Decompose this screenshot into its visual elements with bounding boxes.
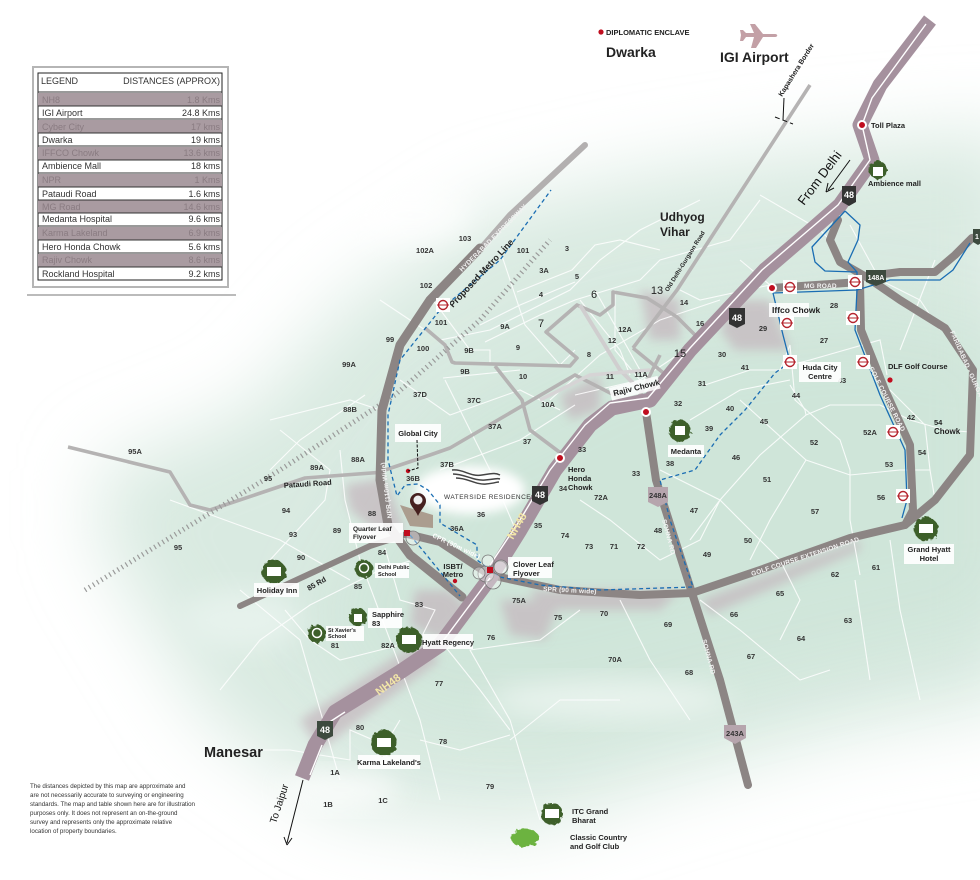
label: Toll Plaza: Toll Plaza <box>871 121 906 130</box>
label: Quarter Leaf Flyover <box>349 523 403 543</box>
sector numbers: 3A <box>539 266 549 275</box>
sector numbers: 45 <box>760 417 768 426</box>
legend row text: 24.8 Kms <box>182 108 220 118</box>
sector numbers: 56 <box>877 493 885 502</box>
large sector numbers: 13 <box>651 285 663 297</box>
sector numbers: 37B <box>440 460 454 469</box>
label: Global City <box>395 424 441 471</box>
legend row text: 1 Kms <box>194 175 220 185</box>
large sector numbers <box>538 285 686 360</box>
sector numbers: 27 <box>820 336 828 345</box>
brown plot and location pin <box>400 493 433 528</box>
legend header: LEGEND <box>41 76 79 86</box>
sector numbers: 30 <box>718 350 726 359</box>
sector numbers: 61 <box>872 563 880 572</box>
large sector numbers: 6 <box>591 289 597 301</box>
sector numbers: 90 <box>297 553 305 562</box>
label: NPR road: NPR (110m Wide) <box>380 462 394 519</box>
sector numbers: 70A <box>608 655 622 664</box>
disclaimer text: purposes only. It does not represent an on-the-ground <box>30 810 178 817</box>
shield 248A: 248A <box>649 491 668 500</box>
sector numbers: 12 <box>608 336 616 345</box>
icon: Ambience mall: Ambience mall <box>868 179 921 188</box>
sector road grid <box>170 195 970 820</box>
icon: Grand Hyatt Hotel <box>904 517 954 564</box>
road labels <box>380 203 980 675</box>
icon: Medanta: Medanta <box>671 447 702 456</box>
sector numbers: 103 <box>459 234 471 243</box>
label: ISBT Metro: ISBT/ <box>443 562 463 571</box>
label: Iffco Chowk: Iffco Chowk <box>772 305 820 315</box>
legend header: DISTANCES (APPROX) <box>123 76 220 86</box>
label: Diplomatic Enclave: DIPLOMATIC ENCLAVE <box>606 28 689 37</box>
sector numbers: 66 <box>730 610 738 619</box>
sector numbers: 67 <box>747 652 755 661</box>
legend shaded rows <box>38 93 222 267</box>
label: Clover Leaf Flyover: Flyover <box>513 569 540 578</box>
icon: Classic Country and Golf Club <box>511 829 628 851</box>
icon: Grand Hyatt Hotel: Grand Hyatt <box>908 545 950 554</box>
sector numbers: 33 <box>632 469 640 478</box>
icon: Classic Country and Golf Club: and Golf Club <box>570 842 620 851</box>
shield 248A <box>648 487 668 507</box>
shield 48 centre: 48 <box>732 313 742 323</box>
legend row text: 19 kms <box>191 135 220 145</box>
sector numbers: 49 <box>703 550 711 559</box>
sector numbers: 36B <box>406 474 420 483</box>
shield 48 south centre: 48 <box>535 490 545 500</box>
icon: Medanta <box>668 420 704 457</box>
legend row text: Karma Lakeland <box>42 228 108 238</box>
NH48 highway <box>302 20 930 778</box>
place labels <box>349 121 961 579</box>
icon: ITC Grand Bharat: ITC Grand <box>572 807 608 816</box>
legend row text: 8.6 kms <box>188 255 220 265</box>
label: Old Delhi-Gurgaon Road: Old Delhi-Gurgaon Road <box>665 230 707 293</box>
legend row text: Rajiv Chowk <box>42 255 93 265</box>
label: Hero Honda Chowk: Chowk <box>568 483 593 492</box>
legend row text: MG Road <box>42 202 81 212</box>
sector numbers: 53 <box>885 460 893 469</box>
label: Udhyog Vihar: Vihar <box>660 225 690 239</box>
legend header <box>41 76 220 86</box>
legend row text: NH8 <box>42 95 60 105</box>
label: ISBT Metro: Metro <box>443 570 464 579</box>
label: Proposed Metro Line: Proposed Metro Line <box>447 237 516 309</box>
legend row text: 6.9 kms <box>188 228 220 238</box>
sector numbers: 79 <box>486 782 494 791</box>
disclaimer text: are not necessarily accurate to surveying or engineering <box>30 792 184 799</box>
icon: Sapphire 83: Sapphire <box>372 610 404 619</box>
highway shields <box>317 186 980 744</box>
label: IGI Airport: IGI Airport <box>720 49 789 65</box>
label: Hero Honda Chowk: Hero <box>568 465 585 474</box>
sector numbers: 34 <box>559 484 568 493</box>
label: Huda City Centre: Huda City <box>802 363 838 372</box>
sector numbers: 99 <box>386 335 394 344</box>
legend row text: 9.2 kms <box>188 269 220 279</box>
sector numbers: 31 <box>698 379 706 388</box>
NH48 lower label: NH48 <box>374 672 403 698</box>
legend row text: 1.8 Kms <box>187 95 220 105</box>
sector numbers: 88A <box>351 455 365 464</box>
icon: Ambience mall <box>868 161 921 188</box>
sector numbers: 9 <box>516 343 520 352</box>
proposed metro hatched line <box>85 240 550 590</box>
shield 48 south centre <box>532 486 548 505</box>
label: Dwarka: Dwarka <box>606 44 656 60</box>
shield 243A: 243A <box>726 729 745 738</box>
sector numbers: 33 <box>578 445 586 454</box>
metro station icons <box>436 275 910 503</box>
sector numbers: 94 <box>282 506 291 515</box>
label: MG Road: MG ROAD <box>804 283 837 290</box>
sector numbers: 78 <box>439 737 447 746</box>
flyover markers <box>404 530 493 573</box>
sector numbers: 89A <box>310 463 324 472</box>
shield 48 south: 48 <box>320 725 330 735</box>
sector numbers: 37A <box>488 422 502 431</box>
sector numbers: 46 <box>732 453 740 462</box>
metro lines <box>388 190 970 596</box>
label: 54 Chowk: Chowk <box>934 427 961 436</box>
legend row text: Ambience Mall <box>42 161 101 171</box>
sector numbers: 101 <box>517 246 529 255</box>
sector numbers: 95 <box>174 543 182 552</box>
dots without halo <box>406 377 893 583</box>
label: Quarter Leaf Flyover: Quarter Leaf <box>353 526 392 533</box>
icon: Sapphire 83 <box>349 608 404 628</box>
sector numbers <box>128 234 927 809</box>
legend row text: Hero Honda Chowk <box>42 242 121 252</box>
large sector numbers: 7 <box>538 318 544 330</box>
label: expressway: HYDERABAD EXPRESSWAY <box>458 203 529 273</box>
shield 48 centre <box>729 308 745 328</box>
sector numbers: 9A <box>500 322 510 331</box>
sector numbers: 11 <box>606 372 614 381</box>
shield 148A: 148A <box>868 275 884 282</box>
pink-grey land patches <box>300 290 860 750</box>
sector numbers: 71 <box>610 542 618 551</box>
disclaimer text: location of property boundaries. <box>30 828 117 835</box>
label: Huda City Centre: Centre <box>808 372 832 381</box>
arrow: To Jaipur <box>268 780 303 845</box>
legend row text <box>42 95 220 279</box>
icon: St Xavier's School: St Xavier's <box>328 628 356 634</box>
legend row text: 17 kms <box>191 122 220 132</box>
sector numbers: 88 <box>368 509 376 518</box>
sector numbers: 40 <box>726 404 734 413</box>
sector numbers: 76 <box>487 633 495 642</box>
sector numbers: 1B <box>323 800 333 809</box>
sector numbers: 37 <box>523 437 531 446</box>
sector numbers: 101 <box>435 318 447 327</box>
label: Udhyog Vihar: Udhyog <box>660 210 705 224</box>
sector numbers: 89 <box>333 526 341 535</box>
sector numbers: 70 <box>600 609 608 618</box>
shield east <box>973 229 980 245</box>
sector numbers: 9B <box>464 346 474 355</box>
legend row text: Rockland Hospital <box>42 269 115 279</box>
label: Rajiv Chowk: Rajiv Chowk <box>612 378 661 398</box>
icon: Holiday Inn: Holiday Inn <box>257 586 298 595</box>
legend row text: 1.6 kms <box>188 189 220 199</box>
sector numbers: 64 <box>797 634 806 643</box>
sector numbers: 102A <box>416 246 435 255</box>
sector numbers: 43 <box>838 376 846 385</box>
label: Manesar: Manesar <box>204 745 263 761</box>
icon: Sapphire 83: 83 <box>372 619 380 628</box>
legend row text: 5.6 kms <box>188 242 220 252</box>
sector numbers: 65 <box>776 589 784 598</box>
legend underline <box>27 294 236 296</box>
shield 48 south <box>317 721 333 740</box>
arrow: To Jaipur: To Jaipur <box>268 782 292 825</box>
sector numbers: 52 <box>810 438 818 447</box>
sector numbers: 83 <box>415 600 423 609</box>
sector numbers: 57 <box>811 507 819 516</box>
sector numbers: 41 <box>741 363 749 372</box>
icon: ITC Grand Bharat <box>541 803 609 825</box>
sector numbers: 10 <box>519 372 527 381</box>
label: Global City: Global City <box>398 429 439 438</box>
arrow: From Delhi: From Delhi <box>794 148 845 208</box>
label: Golf Course Road: GOLF COURSE ROAD <box>867 366 906 433</box>
sector numbers: 1C <box>378 796 388 805</box>
icon: Grand Hyatt Hotel: Hotel <box>920 554 938 563</box>
disclaimer text: survey and represents only the approximate relative <box>30 819 173 826</box>
label: 54 Chowk: 54 <box>934 418 942 427</box>
legend row text: 13.6 kms <box>183 148 220 158</box>
sector numbers: 8 <box>587 350 591 359</box>
label: Clover Leaf Flyover <box>508 557 554 578</box>
label: Iffco Chowk <box>769 303 820 317</box>
icon: St Xavier's School: School <box>328 634 347 640</box>
label: SPR: SPR (90 m wide) <box>543 586 597 596</box>
sector numbers: 100 <box>417 344 429 353</box>
sector numbers: 47 <box>690 506 698 515</box>
shield 48 north <box>842 186 856 206</box>
sector numbers: 42 <box>907 413 915 422</box>
icon: ITC Grand Bharat: Bharat <box>572 816 596 825</box>
icon: Delhi Public School: Delhi Public <box>378 565 409 571</box>
sector numbers: 77 <box>435 679 443 688</box>
icon: airplane <box>740 24 777 48</box>
expressway and SPR roads <box>240 145 980 785</box>
sector numbers: 37D <box>413 390 427 399</box>
sector numbers: 99A <box>342 360 356 369</box>
sector numbers: 80 <box>356 723 364 732</box>
sector numbers: 11A <box>634 370 648 379</box>
sector numbers: 16 <box>696 319 704 328</box>
legend row text: Pataudi Road <box>42 189 97 199</box>
sector numbers: 73 <box>585 542 593 551</box>
label: Quarter Leaf Flyover: Flyover <box>353 534 377 541</box>
shield 148A <box>866 270 886 286</box>
highway text NH48 <box>374 511 530 698</box>
label: 85 Rd: 85 Rd <box>306 575 328 593</box>
sector numbers: 85 <box>354 582 362 591</box>
icon: Hyatt Regency: Hyatt Regency <box>422 638 475 647</box>
sector numbers: 75 <box>554 613 562 622</box>
sector numbers: 12A <box>618 325 632 334</box>
icon: Karma Lakeland: Karma Lakeland's <box>357 758 421 767</box>
legend row text: IGI Airport <box>42 108 83 118</box>
disclaimer text: standards. The map and table shown here are for illustration <box>30 801 196 808</box>
flyover symbols <box>406 531 508 589</box>
label: Clover Leaf Flyover: Clover Leaf <box>513 560 554 569</box>
sector numbers: 75A <box>512 596 526 605</box>
waterside residences logo <box>444 470 536 501</box>
large sector numbers: 15 <box>674 348 686 360</box>
sector numbers: 95A <box>128 447 142 456</box>
red location dots <box>556 121 866 462</box>
sector numbers: 51 <box>763 475 771 484</box>
sector numbers: 82A <box>381 641 395 650</box>
sector numbers: 37C <box>467 396 481 405</box>
label: CPR: CPR (90m wide) <box>431 532 481 561</box>
sector numbers: 35 <box>534 521 542 530</box>
sector numbers: 48 <box>654 526 662 535</box>
sector numbers: 62 <box>831 570 839 579</box>
sector numbers: 68 <box>685 668 693 677</box>
disclaimer text: The distances depicted by this map are approximate and <box>30 783 185 790</box>
sector numbers: 102 <box>420 281 432 290</box>
sector numbers: 14 <box>680 298 689 307</box>
icon: Delhi Public School <box>355 560 409 578</box>
legend row lines <box>38 92 222 267</box>
sector numbers: 28 <box>830 301 838 310</box>
legend row text: Medanta Hospital <box>42 214 112 224</box>
icon: Karma Lakeland <box>357 730 421 769</box>
legend row text: IFFCO Chowk <box>42 148 100 158</box>
sector numbers: 72A <box>594 493 608 502</box>
icon: Hyatt Regency <box>396 627 475 653</box>
sector numbers: 36A <box>450 524 464 533</box>
sector numbers: 69 <box>664 620 672 629</box>
sector numbers: 5 <box>575 272 579 281</box>
waterside residences logo: WATERSIDE RESIDENCES <box>444 494 536 501</box>
sector numbers: 88B <box>343 405 357 414</box>
sector numbers: 36 <box>477 510 485 519</box>
sector numbers: 44 <box>792 391 801 400</box>
sector numbers: 81 <box>331 641 339 650</box>
label: Golf Course Extension Road: GOLF COURSE EXTENSION ROAD <box>750 536 860 578</box>
sector numbers: 72 <box>637 542 645 551</box>
Kapashera Border marker: Kapashera Border <box>778 43 816 98</box>
label: Huda City Centre <box>799 362 841 382</box>
sector numbers: 29 <box>759 324 767 333</box>
legend table <box>33 67 228 287</box>
legend row text: 18 kms <box>191 161 220 171</box>
shield 243A <box>724 725 746 744</box>
sector numbers: 1A <box>330 768 340 777</box>
sector numbers: 4 <box>539 290 544 299</box>
sector numbers: 84 <box>378 548 387 557</box>
legend row text: Dwarka <box>42 135 73 145</box>
shield 48 north: 48 <box>844 190 854 200</box>
legend row text: Cyber City <box>42 122 85 132</box>
sector numbers: 54 <box>918 448 927 457</box>
amenity icons <box>254 161 954 851</box>
icon: Delhi Public School: School <box>378 572 397 578</box>
legend row text: NPR <box>42 175 62 185</box>
NH48 upper label: NH48 <box>505 511 530 542</box>
sector numbers: 38 <box>666 459 674 468</box>
sector numbers: 63 <box>844 616 852 625</box>
sector numbers: 10A <box>541 400 555 409</box>
label: Sohna Rd lower: SOHNA RD <box>700 639 716 675</box>
sector numbers: 39 <box>705 424 713 433</box>
icon: Classic Country and Golf Club: Classic Country <box>570 833 627 842</box>
sector numbers: 52A <box>863 428 877 437</box>
light grey sector roads <box>68 85 810 510</box>
icon: Holiday Inn <box>254 560 299 597</box>
sector numbers: 95 <box>264 474 272 483</box>
label: Hero Honda Chowk: Honda <box>568 474 592 483</box>
label: Pataudi Road: Pataudi Road <box>284 478 332 490</box>
sector numbers: 50 <box>744 536 752 545</box>
label: Sohna Rd upper: SOHNA RD <box>660 519 676 555</box>
legend row text: 9.6 kms <box>188 214 220 224</box>
icon: St Xavier's School <box>308 625 364 643</box>
sector numbers: 9B <box>460 367 470 376</box>
sector numbers: 93 <box>289 530 297 539</box>
sector numbers: 3 <box>565 244 569 253</box>
legend row text: 14.6 kms <box>183 202 220 212</box>
shield east: 1 <box>975 234 979 241</box>
label: DLF Golf Course: DLF Golf Course <box>888 362 948 371</box>
sector numbers: 74 <box>561 531 570 540</box>
Kapashera Border marker <box>775 43 816 124</box>
sector numbers: 32 <box>674 399 682 408</box>
